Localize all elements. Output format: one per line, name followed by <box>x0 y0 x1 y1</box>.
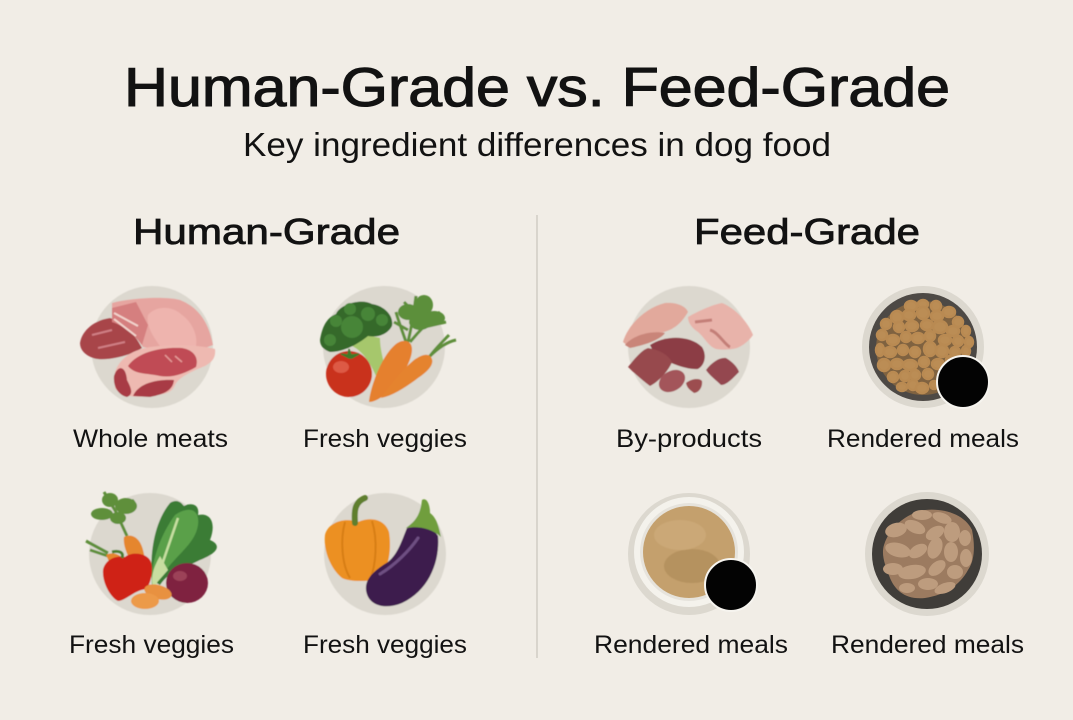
icon: whole meats <box>80 286 215 408</box>
icon: powder bowl <box>628 493 757 615</box>
label: Fresh veggies 3: Fresh veggies <box>303 631 467 659</box>
label: Whole meats: Whole meats <box>73 425 228 453</box>
icon: bell pepper and eggplant <box>324 493 446 615</box>
label: By-products: By-products <box>616 425 762 453</box>
icon: mixed vegetables <box>86 492 217 615</box>
heading: Feed-Grade: Feed-Grade <box>694 211 920 252</box>
title: Human-Grade vs. Feed-Grade <box>124 56 950 118</box>
heading: Human-Grade: Human-Grade <box>133 211 400 252</box>
icon: kibble bowl <box>862 286 989 408</box>
black dot <box>937 356 989 408</box>
label: Rendered meals 2: Rendered meals <box>594 631 788 659</box>
label: Rendered meals 1: Rendered meals <box>827 425 1019 453</box>
label: Rendered meals 3: Rendered meals <box>831 631 1024 659</box>
icon: by-products <box>623 286 753 408</box>
icon: broccoli, tomato and carrots <box>320 286 456 408</box>
subtitle: Key ingredient differences in dog food <box>243 126 831 163</box>
black dot <box>705 559 757 611</box>
label: Fresh veggies 1: Fresh veggies <box>303 425 467 453</box>
label: Fresh veggies 2: Fresh veggies <box>69 631 234 659</box>
icon: wet meat bowl <box>865 492 989 616</box>
